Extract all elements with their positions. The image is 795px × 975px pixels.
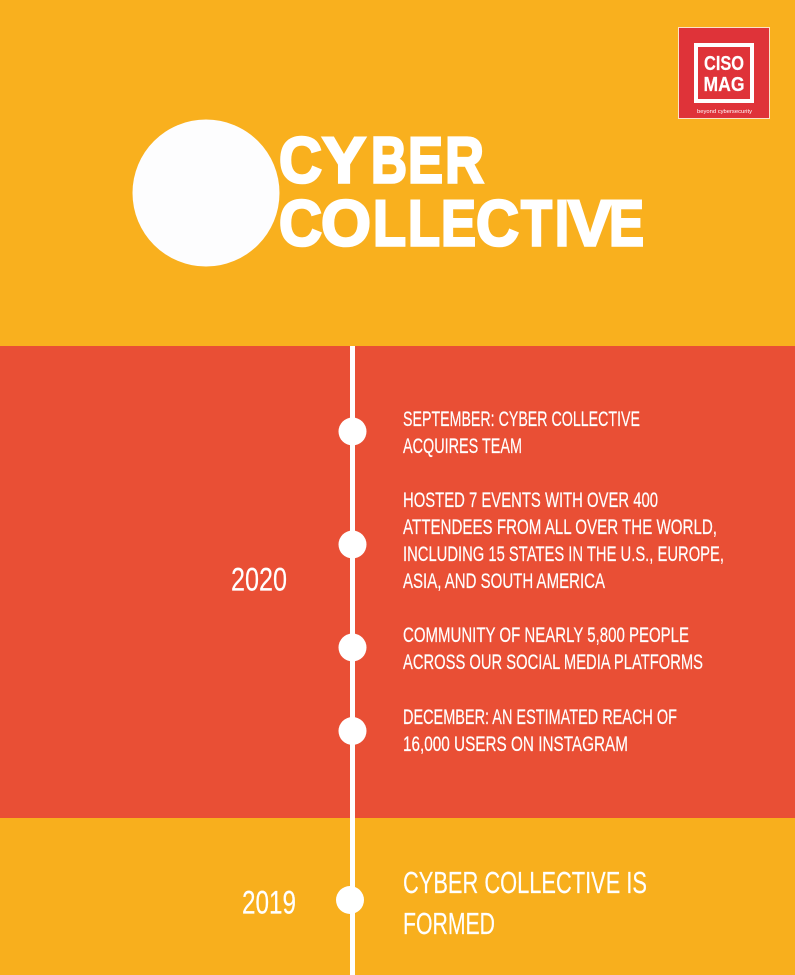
logo: Cyber Collective: R (445, 124, 484, 196)
text block: events hosted: HOSTED 7 EVENTS WITH OVER 400 (403, 488, 658, 512)
timeline line (350, 346, 355, 975)
timeline dot: events (338, 530, 366, 558)
year label: 2019: 2019 (242, 884, 296, 920)
text block: September acquisition: ACQUIRES TEAM (403, 434, 522, 458)
text block: 2019 formed: FORMED (403, 906, 495, 941)
timeline dot: 2019 (336, 886, 364, 914)
text block: December reach (403, 705, 677, 756)
logo: Cyber Collective: I (555, 186, 569, 260)
year label: 2020: 2020 (231, 562, 287, 598)
logo: Cyber Collective: T (521, 186, 552, 260)
logo: Cyber Collective: Y (322, 124, 366, 196)
timeline dot: December (338, 717, 366, 745)
logo: CISO MAG badge: beyond cybersecurity (697, 109, 752, 115)
text block: community (403, 623, 703, 674)
logo: Cyber Collective (132, 120, 644, 266)
logo: Cyber Collective: B (371, 124, 407, 196)
logo: CISO MAG badge: MAG (704, 74, 744, 96)
timeline dot: community (338, 634, 366, 662)
logo: Cyber Collective: V (568, 186, 612, 260)
logo: CISO MAG badge (678, 28, 770, 118)
text block: September acquisition (403, 407, 640, 458)
logo: Cyber Collective: E (609, 186, 644, 260)
panel: 2020 section background (0, 346, 795, 818)
logo: Cyber Collective: C (279, 186, 322, 260)
text block: September acquisition: SEPTEMBER: CYBER COLLECTIVE (403, 407, 640, 431)
logo: Cyber Collective: E (441, 186, 476, 260)
logo: Cyber Collective: E (408, 124, 443, 196)
logo: Cyber Collective: C (476, 186, 519, 260)
panel: header background (0, 0, 795, 346)
logo: Cyber Collective: C (279, 124, 322, 196)
text block: December reach: 16,000 USERS ON INSTAGRAM (403, 732, 628, 756)
panel: 2019 section background (0, 818, 795, 975)
logo: Cyber Collective: L (408, 186, 440, 260)
logo: Cyber Collective: O (321, 186, 371, 260)
text block: 2019 formed (403, 865, 647, 941)
text block: events hosted (403, 488, 724, 593)
text block: 2019 formed: CYBER COLLECTIVE IS (403, 865, 647, 900)
timeline dot: September (338, 418, 366, 446)
text block: events hosted: ASIA, AND SOUTH AMERICA (403, 569, 605, 593)
logo: CISO MAG badge: CISO (704, 53, 744, 75)
logo: Cyber Collective: L (373, 186, 406, 260)
